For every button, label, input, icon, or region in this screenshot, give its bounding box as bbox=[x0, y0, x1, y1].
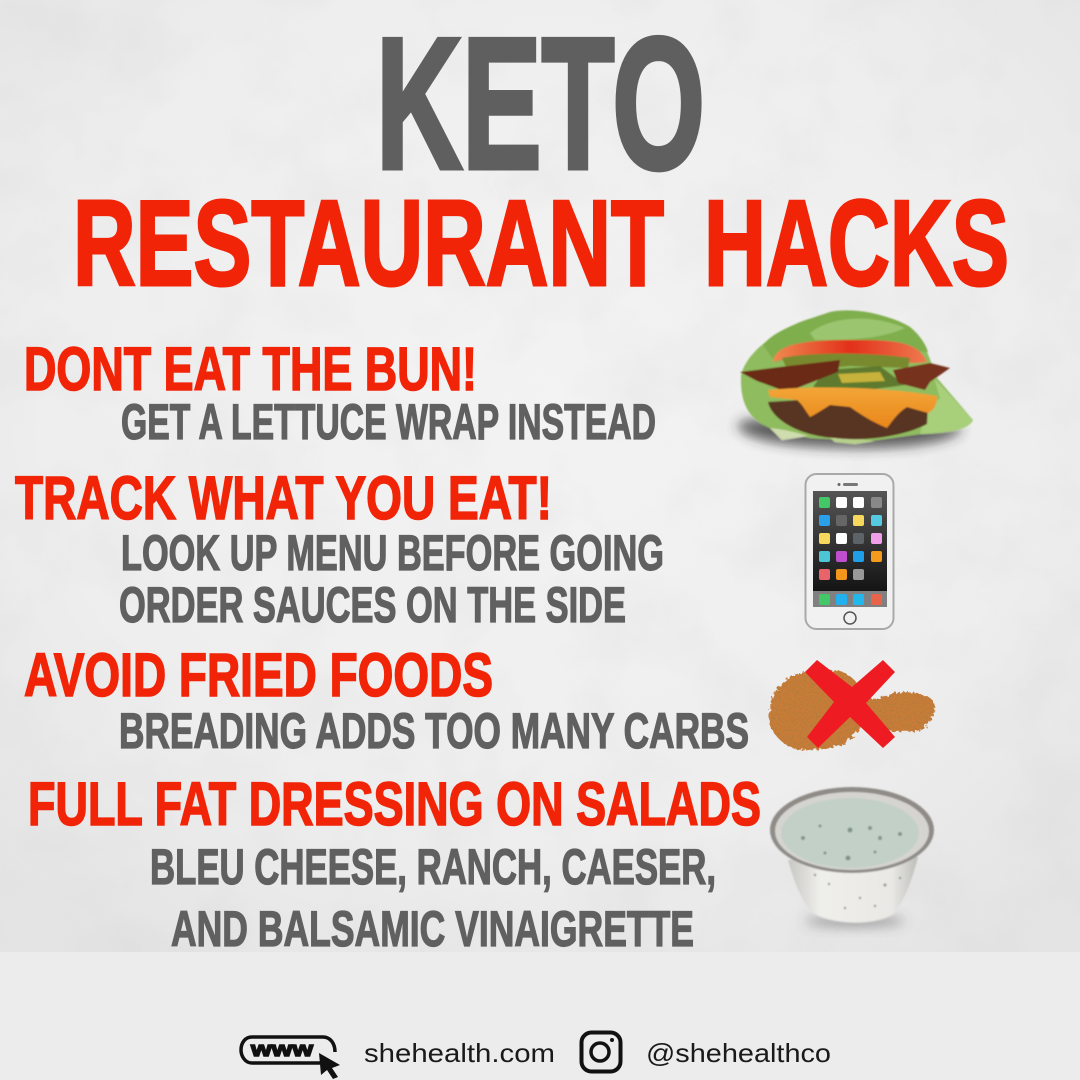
hack 4 detail line 1: BLEU CHEESE, RANCH, CAESER, bbox=[150, 839, 716, 895]
instagram handle: @shehealthco bbox=[646, 1038, 831, 1068]
icon: smartphone bbox=[806, 474, 894, 629]
hack 3 detail: BREADING ADDS TOO MANY CARBS bbox=[119, 703, 749, 759]
fried chicken bbox=[769, 670, 934, 750]
title: KETO: KETO bbox=[376, 0, 705, 208]
icon: www cursor bbox=[241, 1037, 340, 1079]
hack 2 detail line 1: LOOK UP MENU BEFORE GOING bbox=[121, 525, 664, 581]
hack 1: don't eat the bun bbox=[24, 335, 656, 450]
icon: lettuce wrap burger bbox=[737, 310, 973, 448]
hack 4: full fat dressing bbox=[28, 770, 761, 957]
hack 3: avoid fried foods bbox=[24, 641, 749, 759]
footer: instagram bbox=[582, 1032, 831, 1072]
icon: fried chicken crossed out bbox=[769, 660, 934, 750]
footer: website bbox=[241, 1037, 555, 1079]
hack 4 detail line 2: AND BALSAMIC VINAIGRETTE bbox=[171, 901, 694, 957]
hack 2: track what you eat bbox=[15, 464, 664, 633]
website text: shehealth.com bbox=[364, 1038, 555, 1068]
hack 1 heading: DONT EAT THE BUN! bbox=[24, 335, 477, 403]
hack 4 heading: FULL FAT DRESSING ON SALADS bbox=[28, 770, 761, 838]
icon: www cursor: www bbox=[250, 1039, 314, 1061]
title: RESTAURANT HACKS: RESTAURANT bbox=[73, 175, 664, 311]
hack 2 heading: TRACK WHAT YOU EAT! bbox=[15, 464, 552, 532]
red cross bbox=[805, 660, 895, 748]
icon: instagram bbox=[582, 1032, 620, 1072]
hack 1 detail: GET A LETTUCE WRAP INSTEAD bbox=[121, 394, 656, 450]
hack 3 heading: AVOID FRIED FOODS bbox=[24, 641, 493, 709]
icon: dressing cup bbox=[770, 787, 934, 927]
hack 2 detail line 2: ORDER SAUCES ON THE SIDE bbox=[119, 577, 626, 633]
